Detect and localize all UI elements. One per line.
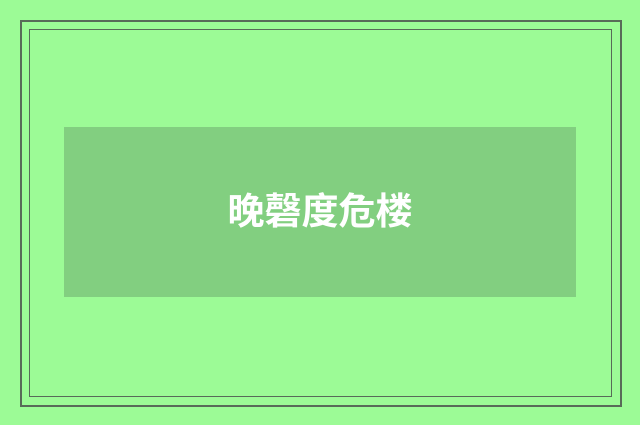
inner frame bbox=[29, 29, 612, 397]
title panel bbox=[64, 127, 576, 297]
title: 晚磬度危楼 bbox=[228, 191, 412, 232]
